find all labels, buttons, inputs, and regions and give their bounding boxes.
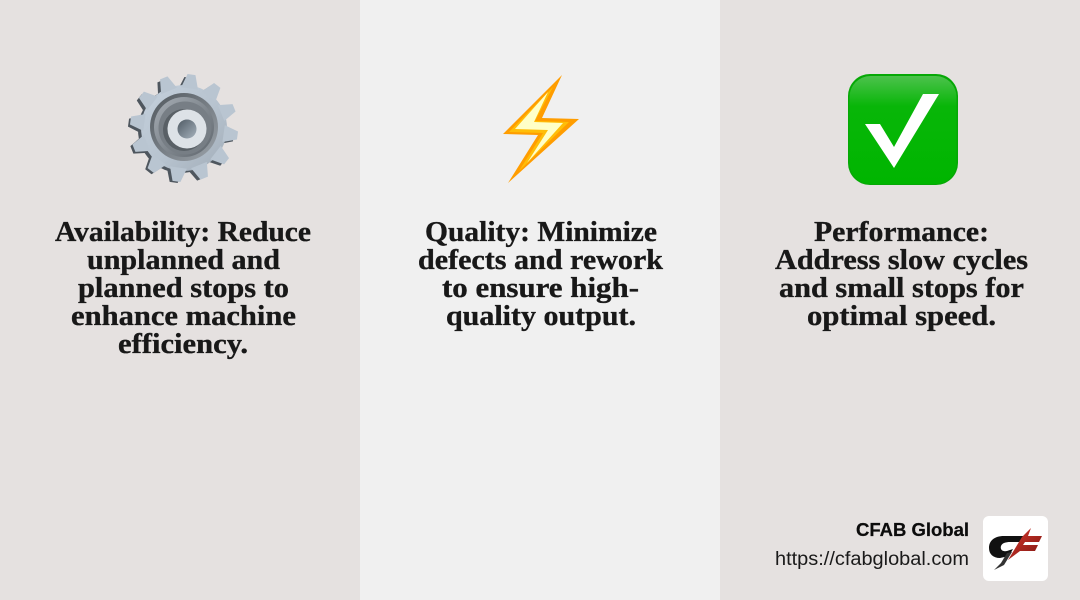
heading: performance: Address slow cycles	[775, 244, 1028, 276]
heading: performance: Performance:	[814, 216, 989, 248]
heading: availability: planned stops to	[78, 272, 289, 304]
panel: availability	[0, 0, 360, 600]
brand name: CFAB Global	[856, 519, 969, 540]
heading: quality: quality output.	[446, 300, 636, 332]
heading: quality	[418, 216, 664, 332]
heading: availability: Availability: Reduce	[55, 216, 311, 248]
heading: availability	[55, 216, 311, 360]
website url: https://cfabglobal.com	[775, 549, 969, 570]
panel: quality	[360, 0, 720, 600]
heading: performance: optimal speed.	[807, 300, 996, 332]
heading: availability: unplanned and	[87, 244, 280, 276]
icon: check mark box	[848, 74, 958, 185]
heading: availability: efficiency.	[118, 328, 248, 360]
heading: performance: and small stops for	[779, 272, 1024, 304]
icon: lightning bolt	[503, 75, 579, 183]
heading: availability: enhance machine	[71, 300, 296, 332]
heading: performance	[775, 216, 1028, 332]
logo	[983, 516, 1048, 581]
heading: quality: to ensure high-	[442, 272, 639, 304]
heading: quality: Quality: Minimize	[425, 216, 657, 248]
heading: quality: defects and rework	[418, 244, 664, 276]
panel: performance	[720, 0, 1080, 600]
icon: gear	[127, 73, 239, 184]
